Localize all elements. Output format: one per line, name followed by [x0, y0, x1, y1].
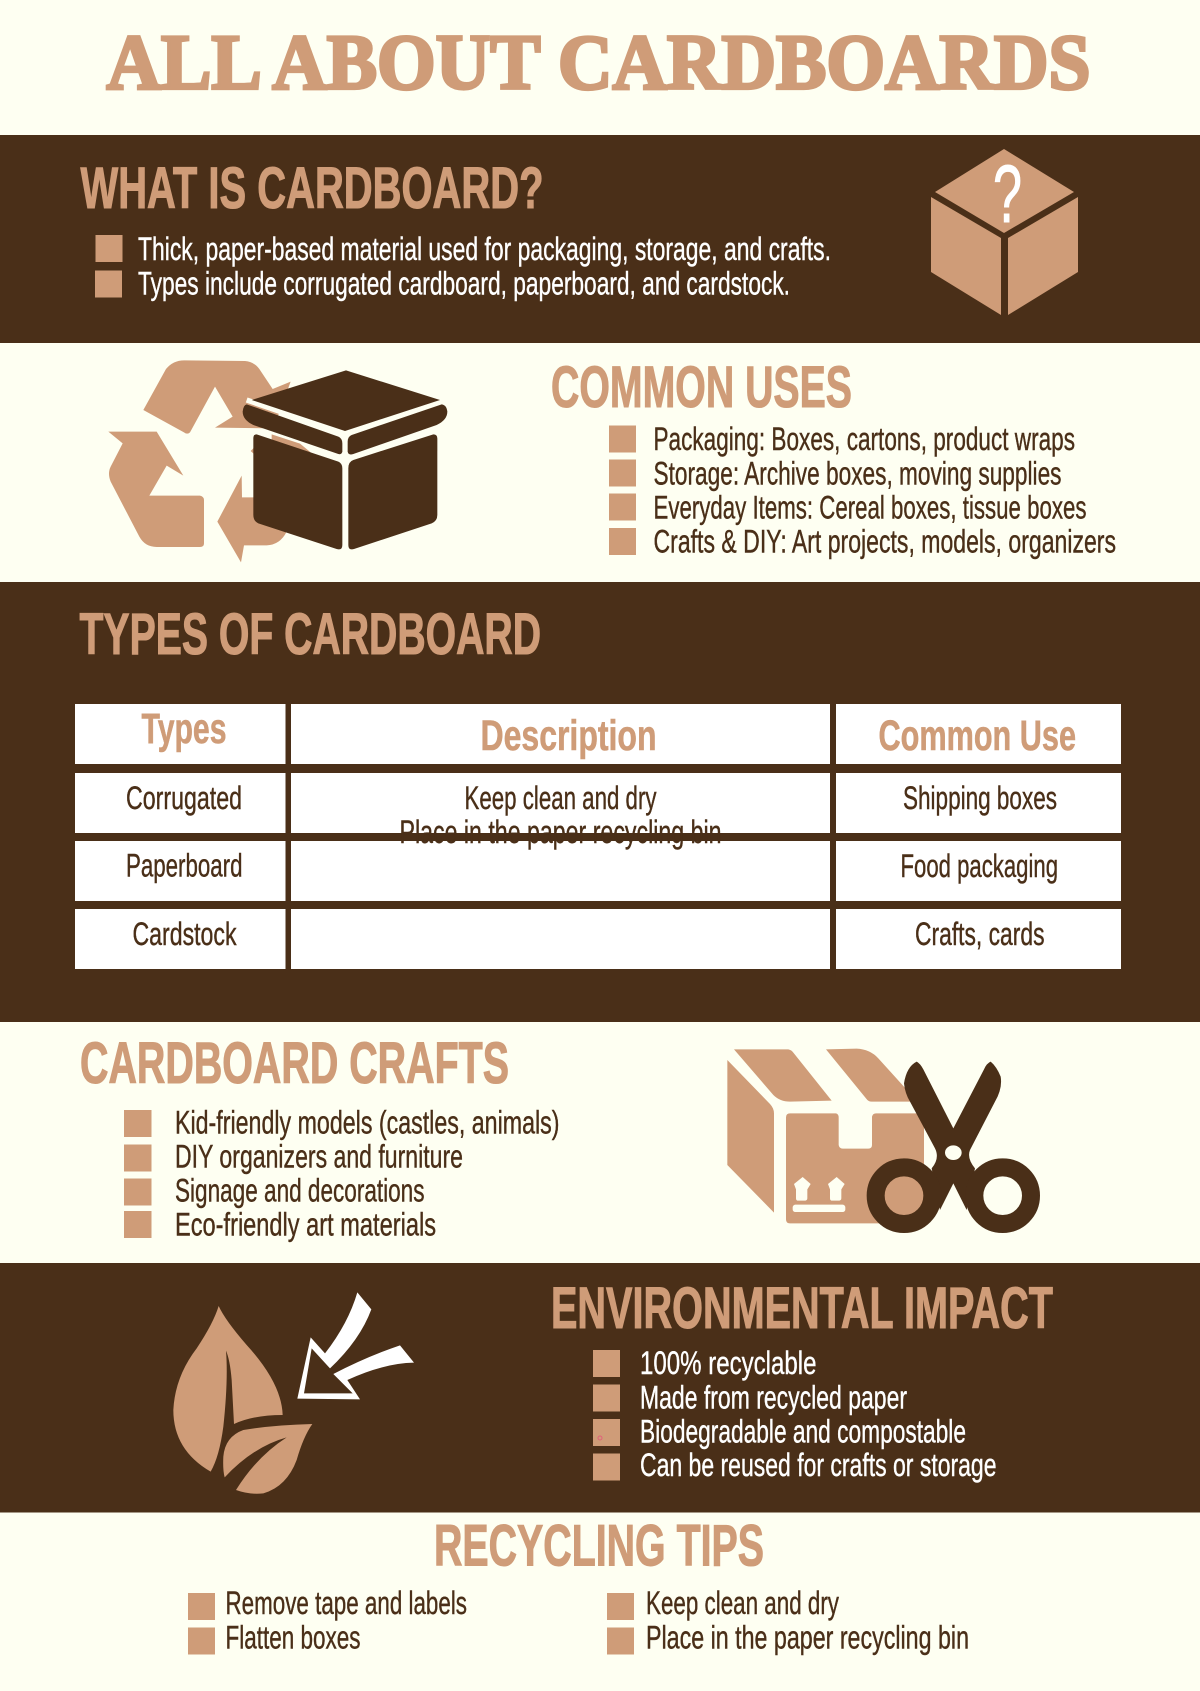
table: Description — [480, 712, 656, 760]
table: Crafts, cards — [915, 916, 1044, 952]
bullet list: definition: Types include corrugated cardboard, paperboard, and cardstock. — [138, 266, 790, 302]
bullet list: tips left — [188, 1585, 467, 1656]
title: ALL ABOUT CARDBOARDS — [106, 18, 1090, 106]
panel: what is cardboard — [0, 135, 1200, 343]
bullet list: impact: Biodegradable and compostable — [640, 1414, 966, 1450]
bullet list: crafts: Signage and decorations — [175, 1172, 424, 1208]
panel: environmental impact — [0, 1263, 1200, 1512]
bullet list: tips right: Keep clean and dry — [646, 1585, 839, 1621]
panel: common uses — [108, 355, 1116, 562]
bullet list: definition: Thick, paper-based material used for packaging, storage, and crafts. — [138, 231, 831, 267]
panel: types of cardboard — [0, 582, 1200, 1022]
icon: white arrows — [297, 1292, 414, 1399]
bullet list: impact: Made from recycled paper — [640, 1380, 907, 1416]
icon: leaves — [173, 1306, 312, 1494]
panel: recycling tips — [188, 1514, 969, 1656]
icon: recycling symbol with box — [108, 360, 447, 562]
heading: recycling tips: RECYCLING TIPS — [434, 1514, 764, 1578]
table — [75, 704, 1121, 969]
table: Common Use — [878, 712, 1076, 760]
heading: common uses: COMMON USES — [551, 355, 852, 420]
bullet list: impact: 100% recyclable — [640, 1345, 816, 1381]
heading: cardboard crafts: CARDBOARD CRAFTS — [80, 1031, 509, 1096]
table: Food packaging — [900, 848, 1058, 884]
bullet list: tips right: Place in the paper recycling bin — [646, 1620, 969, 1656]
bullet list: tips left: Flatten boxes — [226, 1620, 360, 1656]
panel: cardboard crafts — [80, 1031, 1031, 1242]
heading: types of cardboard: TYPES OF CARDBOARD — [80, 602, 541, 667]
table: Keep clean and dry — [464, 780, 656, 816]
table: Paperboard — [126, 848, 242, 884]
table: Shipping boxes — [903, 780, 1057, 816]
bullet list: crafts: DIY organizers and furniture — [175, 1138, 463, 1174]
bullet list: impact — [593, 1345, 996, 1483]
bullet list: impact: Can be reused for crafts or storage — [640, 1447, 996, 1483]
bullet list: tips right — [607, 1585, 969, 1656]
bullet list: crafts: Eco-friendly art materials — [175, 1206, 436, 1242]
table: Cardstock — [132, 916, 237, 952]
bullet list: uses — [609, 421, 1116, 560]
table: Place in the paper recycling bin — [400, 814, 722, 850]
icon: box with question mark: ? — [993, 149, 1022, 240]
bullet list: crafts — [124, 1104, 560, 1242]
bullet list: tips left: Remove tape and labels — [226, 1585, 467, 1621]
table: Types — [142, 705, 226, 753]
heading: what is cardboard: WHAT IS CARDBOARD? — [80, 156, 544, 221]
icon: box with question mark — [931, 149, 1078, 315]
table: Corrugated — [126, 780, 242, 816]
icon: parcel and scissors — [727, 1049, 1031, 1224]
bullet list: crafts: Kid-friendly models (castles, animals) — [175, 1104, 560, 1140]
bullet list: definition — [95, 231, 831, 302]
